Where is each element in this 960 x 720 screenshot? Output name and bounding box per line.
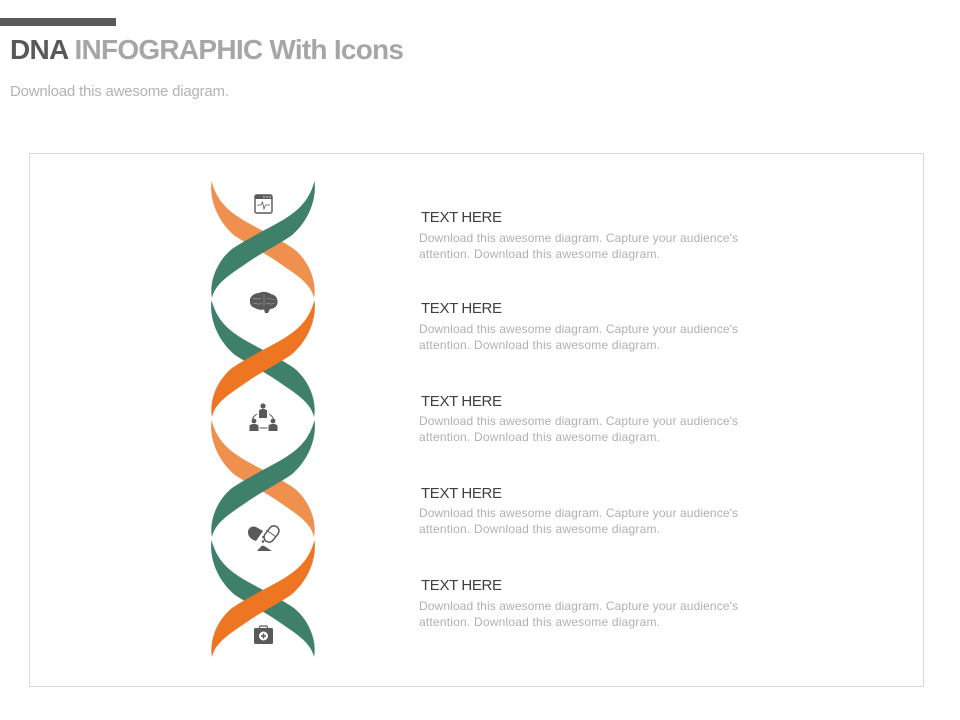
ribbon segment 2 green <box>211 300 315 417</box>
icon: capsule and pills <box>248 524 281 551</box>
text block 3 <box>419 393 738 444</box>
ribbon segment 1 orange <box>211 181 315 298</box>
text block 2 <box>419 300 738 352</box>
icon: team cycle <box>250 403 278 431</box>
subtitle: Download this awesome diagram. <box>10 83 229 100</box>
icon: browser window with heartbeat <box>255 195 272 213</box>
ribbon segment 3 orange <box>211 420 315 537</box>
text block 2: Download this awesome diagram. Capture your audience's <box>419 322 738 336</box>
text block 4: attention. Download this awesome diagram. <box>419 522 660 536</box>
text block 5: TEXT HERE <box>421 577 502 594</box>
text block 4: TEXT HERE <box>421 485 502 502</box>
text block 1 <box>419 209 738 261</box>
text block 3: TEXT HERE <box>421 393 502 410</box>
text block 5: attention. Download this awesome diagram. <box>419 615 660 629</box>
text block 1: attention. Download this awesome diagram. <box>419 247 660 261</box>
text block 5 <box>419 577 738 629</box>
text block 3: attention. Download this awesome diagram. <box>419 430 660 444</box>
text block 2: attention. Download this awesome diagram. <box>419 338 660 352</box>
icon: brain <box>250 292 278 313</box>
text block 2: TEXT HERE <box>421 300 502 317</box>
header accent bar <box>0 18 116 26</box>
ribbon segment 2 dark orange <box>211 300 315 417</box>
text block 4: Download this awesome diagram. Capture your audience's <box>419 506 738 520</box>
text block 3: Download this awesome diagram. Capture your audience's <box>419 414 738 428</box>
ribbon segment 3 green <box>211 420 315 537</box>
ribbon segment 4 dark orange <box>211 540 315 657</box>
ribbon segment 1 green <box>211 181 315 298</box>
text block 1: Download this awesome diagram. Capture your audience's <box>419 231 738 245</box>
panel: main frame <box>30 154 924 686</box>
chart: DNA double helix <box>211 181 315 657</box>
icon: medical kit <box>254 626 273 644</box>
text block 5: Download this awesome diagram. Capture your audience's <box>419 599 738 613</box>
text block 4 <box>419 485 738 536</box>
text block 1: TEXT HERE <box>421 209 502 226</box>
ribbon segment 4 green <box>211 540 315 657</box>
title: DNA INFOGRAPHIC With Icons <box>10 34 404 65</box>
